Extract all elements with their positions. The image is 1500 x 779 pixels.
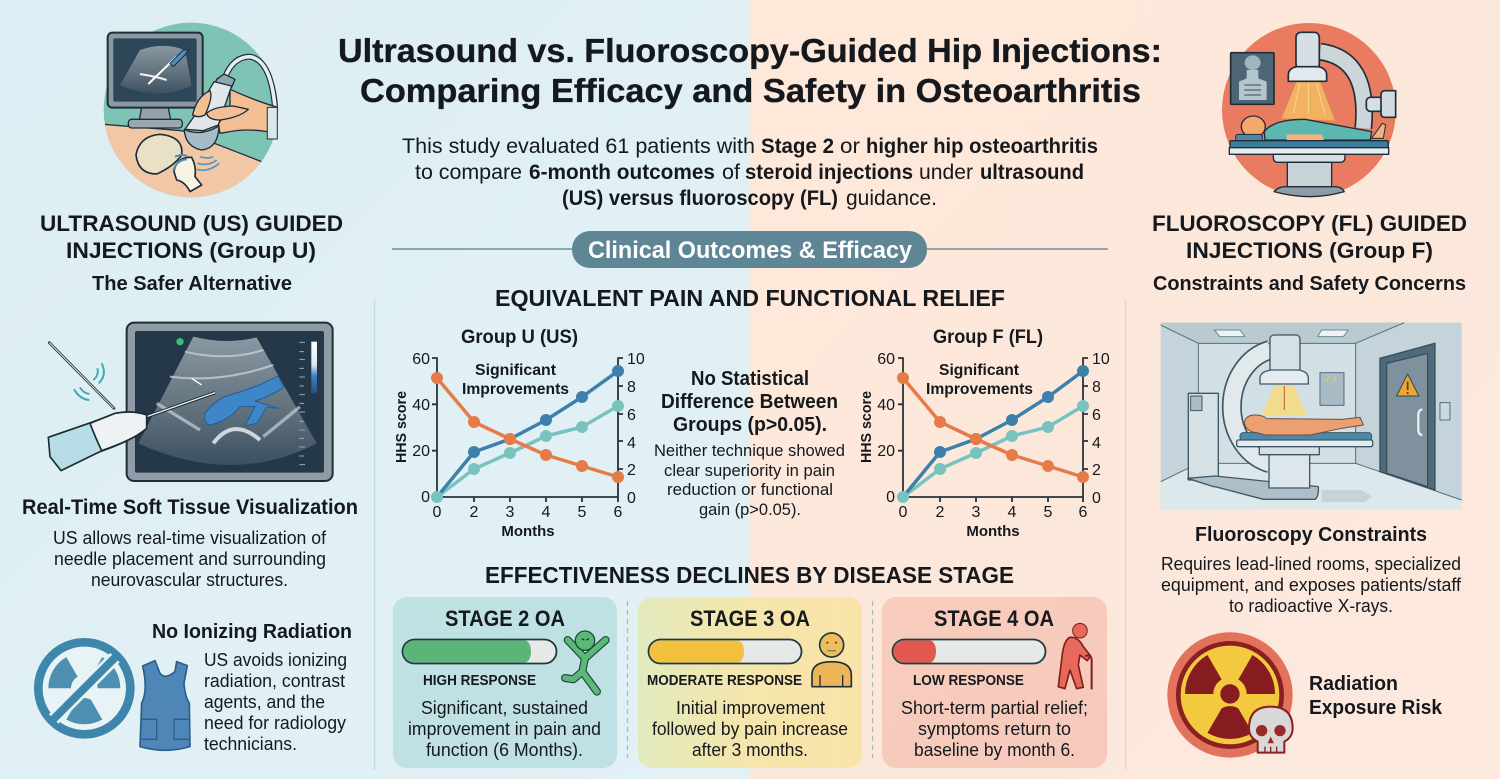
chart: group U: Group U (US) [461, 327, 578, 348]
intro text block [402, 135, 1098, 210]
heading: effectiveness declines: EFFECTIVENESS DECLINES BY DISEASE STAGE [485, 562, 1014, 588]
intro text block: 6-month outcomes [529, 161, 715, 184]
title: Ultrasound vs. Fluoroscopy-Guided Hip Injections: [338, 32, 1162, 69]
text block: real-time visualization: neurovascular structures. [91, 570, 288, 590]
text block: no ionizing radiation [152, 620, 352, 754]
chart: group F: 10 [1092, 351, 1110, 368]
chart: group F: Group F (FL) [933, 327, 1043, 348]
text block: real-time visualization [22, 496, 358, 590]
panel: stage 3: followed by pain increase [652, 719, 848, 739]
panel: stage 4: STAGE 4 OA [934, 606, 1054, 631]
intro text block: under [919, 161, 973, 184]
chart: group F: 0 [886, 489, 895, 506]
chart: group U: 6 [614, 504, 623, 521]
text block: fluoroscopy constraints: equipment, and exposes patients/staff [1161, 575, 1462, 595]
intro text block: (US) versus fluoroscopy (FL) [562, 187, 838, 210]
text block: real-time visualization: needle placement and surrounding [54, 549, 326, 569]
chart: group U: 4 [542, 504, 551, 521]
intro text block: steroid injections [745, 161, 913, 184]
heading: fluoroscopy panel: FLUOROSCOPY (FL) GUIDED [1152, 211, 1467, 236]
panel: stage 3: STAGE 3 OA [690, 606, 810, 631]
chart: group F: Improvements [926, 381, 1033, 398]
panel: stage 4: LOW RESPONSE [913, 673, 1024, 689]
panel: stage 4: symptoms return to [918, 719, 1071, 739]
panel: stage 2: STAGE 2 OA [445, 606, 565, 631]
label: radiation exposure risk [1309, 672, 1443, 719]
panel: stage 2: improvement in pain and [408, 719, 601, 739]
chart: group F: 6 [1092, 407, 1101, 424]
chart: group F: 2 [936, 504, 945, 521]
panel: stage 4: baseline by month 6. [914, 740, 1075, 760]
chart: group U: 10 [627, 351, 645, 368]
intro text block: or [840, 135, 860, 158]
label: radiation exposure risk: Exposure Risk [1309, 696, 1443, 719]
callout: no statistical difference: Neither technique showed [654, 442, 845, 460]
text block: fluoroscopy constraints [1161, 523, 1462, 616]
icon: lead apron [140, 661, 190, 750]
text block: no ionizing radiation: No Ionizing Radiation [152, 620, 352, 643]
text block: real-time visualization: Real-Time Soft Tissue Visualization [22, 496, 358, 519]
chart: group F: 2 [1092, 462, 1101, 479]
chart: group U: HHS score [393, 391, 410, 463]
intro text block: to compare [415, 161, 522, 184]
intro text block: of [722, 161, 740, 184]
chart: group F: 3 [972, 504, 981, 521]
chart: group F: 20 [877, 443, 895, 460]
intro text block: This study evaluated 61 patients with [402, 135, 755, 158]
heading: ultrasound panel [40, 211, 343, 295]
background: ultrasound side [0, 0, 750, 779]
chart: group U: 60 [412, 351, 430, 368]
intro text block: Stage 2 [761, 135, 834, 158]
heading: ultrasound panel: The Safer Alternative [92, 273, 292, 295]
chart: group U: 8 [627, 379, 636, 396]
chart: group U: 40 [412, 397, 430, 414]
section banner: clinical outcomes [392, 231, 1108, 268]
intro text block: higher hip osteoarthritis [866, 135, 1098, 158]
panel: stage 4 [882, 597, 1107, 768]
chart: group F: 0 [899, 504, 908, 521]
callout: no statistical difference: Difference Between [661, 391, 838, 413]
panel: stage 4: Short-term partial relief; [901, 698, 1088, 718]
heading: ultrasound panel: ULTRASOUND (US) GUIDED [40, 211, 343, 236]
chart: group U: 6 [627, 407, 636, 424]
panel: stage 2 [393, 597, 617, 768]
icon: ultrasound screen with needle [48, 323, 333, 481]
chart: group F: 0 [1092, 490, 1101, 507]
panel: stage 3: after 3 months. [692, 740, 808, 760]
chart: group U [393, 327, 645, 540]
icon: radiation hazard with skull [1167, 632, 1293, 758]
title: Comparing Efficacy and Safety in Osteoarthritis [360, 72, 1141, 109]
text block: fluoroscopy constraints: to radioactive X-rays. [1229, 596, 1393, 616]
panel: stage 3 [638, 597, 862, 768]
panel: stage 2: HIGH RESPONSE [423, 673, 536, 689]
callout: no statistical difference: No Statistical [691, 368, 809, 390]
text block: fluoroscopy constraints: Requires lead-lined rooms, specialized [1161, 554, 1461, 574]
chart: group F: 8 [1092, 379, 1101, 396]
intro text block: guidance. [846, 187, 937, 210]
heading: equivalent pain and functional relief: EQUIVALENT PAIN AND FUNCTIONAL RELIEF [495, 285, 1005, 311]
panel: stage 2: Significant, sustained [421, 698, 588, 718]
text block: no ionizing radiation: agents, and the [204, 692, 325, 712]
chart: group F: 5 [1044, 504, 1053, 521]
section banner: clinical outcomes: Clinical Outcomes & Efficacy [588, 237, 913, 264]
text block: no ionizing radiation: technicians. [204, 734, 297, 754]
icon: no radiation symbol [38, 642, 130, 734]
callout: no statistical difference [654, 368, 845, 519]
background: fluoroscopy side [750, 0, 1500, 779]
chart: group F: HHS score [858, 391, 875, 463]
chart: group U: 0 [421, 489, 430, 506]
chart: group U: Improvements [462, 381, 569, 398]
heading: fluoroscopy panel [1152, 211, 1467, 295]
chart: group U: Months [501, 523, 555, 540]
chart: group F: 4 [1092, 435, 1101, 452]
chart: group U: 5 [578, 504, 587, 521]
chart: group F: 60 [877, 351, 895, 368]
chart: group F: 40 [877, 397, 895, 414]
chart: group U: 4 [627, 435, 636, 452]
callout: no statistical difference: reduction or functional [667, 481, 833, 499]
text block: real-time visualization: US allows real-time visualization of [53, 528, 327, 548]
heading: fluoroscopy panel: INJECTIONS (Group F) [1186, 238, 1433, 263]
callout: no statistical difference: gain (p>0.05). [699, 501, 801, 519]
chart: group U: 2 [470, 504, 479, 521]
chart: group U: 0 [433, 504, 442, 521]
chart: group U: 2 [627, 462, 636, 479]
callout: no statistical difference: clear superiority in pain [664, 462, 835, 480]
text block: no ionizing radiation: US avoids ionizing [204, 650, 347, 670]
icon: ultrasound hip scan [100, 23, 278, 207]
text block: no ionizing radiation: need for radiology [204, 713, 346, 733]
chart: group U: 0 [627, 490, 636, 507]
chart: group U: 3 [506, 504, 515, 521]
panel: stage 3: MODERATE RESPONSE [647, 673, 802, 689]
chart: group F [858, 327, 1110, 540]
chart: group F: 6 [1079, 504, 1088, 521]
title [338, 32, 1162, 109]
panel: stage 2: function (6 Months). [426, 740, 583, 760]
chart: group F: Months [966, 523, 1020, 540]
heading: ultrasound panel: INJECTIONS (Group U) [66, 238, 316, 263]
text block: fluoroscopy constraints: Fluoroscopy Constraints [1195, 523, 1427, 546]
text block: no ionizing radiation: radiation, contrast [204, 671, 345, 691]
heading: fluoroscopy panel: Constraints and Safety Concerns [1153, 273, 1466, 295]
illustration: fluoroscopy room [1161, 323, 1462, 509]
chart: group U: 20 [412, 443, 430, 460]
chart: group F: 4 [1008, 504, 1017, 521]
chart: group U: Significant [475, 362, 557, 379]
chart: group F: Significant [939, 362, 1020, 379]
panel: stage 3: Initial improvement [676, 698, 825, 718]
callout: no statistical difference: Groups (p>0.05). [673, 414, 827, 436]
label: radiation exposure risk: Radiation [1309, 672, 1398, 695]
icon: fluoroscopy machine [1222, 23, 1396, 197]
intro text block: ultrasound [980, 161, 1084, 184]
